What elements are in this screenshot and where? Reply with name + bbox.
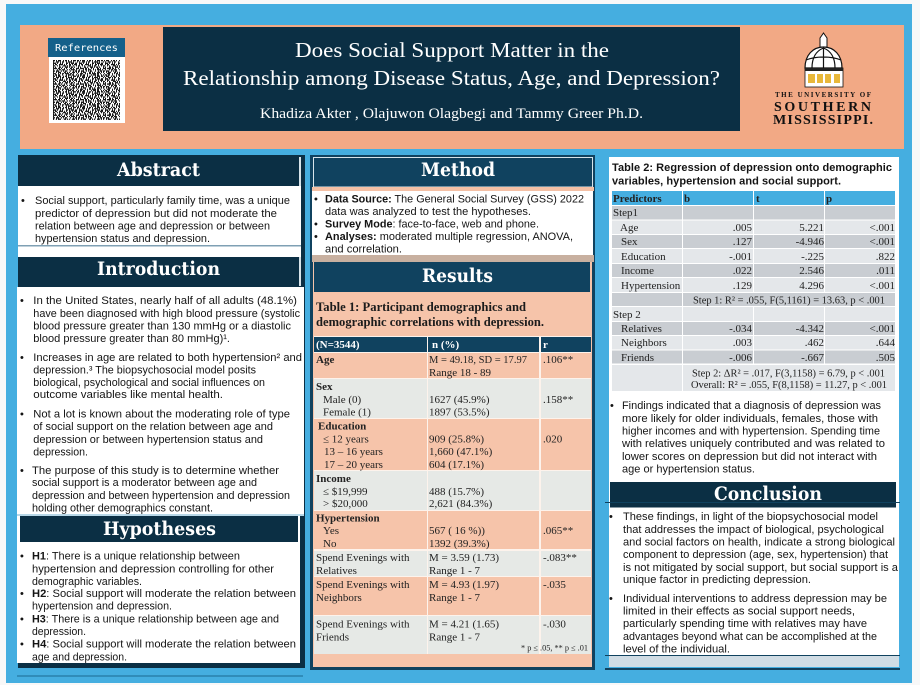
- panel: method: Survey Mode: face-to-face, web and phone.: [325, 218, 539, 230]
- table 2: b: [684, 193, 690, 205]
- table 2: .462: [805, 337, 824, 349]
- table 1: Yes: [323, 525, 339, 537]
- panel: introduction: •: [20, 295, 24, 307]
- panel: conclusion: is not mitigated by social support, but social support is a: [623, 562, 899, 574]
- table 1: .106**: [543, 354, 573, 366]
- panel: hypotheses: •: [20, 638, 24, 650]
- panel: introduction: Not a lot is known about the moderating role of type: [33, 408, 290, 420]
- table 2: Hypertension: [621, 280, 681, 292]
- table 1: Range 1 - 7: [429, 592, 481, 604]
- table 2: Step 2: [613, 309, 641, 321]
- panel: results: [313, 262, 592, 667]
- panel: abstract: hypertension status and depression.: [35, 233, 210, 245]
- middle column: [310, 155, 595, 670]
- panel: conclusion: that addresses the impact of biological, psychological: [623, 524, 884, 536]
- panel: conclusion: component to depression (age, sex, hypertension) that: [623, 549, 888, 561]
- panel: conclusion: •: [609, 511, 613, 523]
- table 1: Spend Evenings with: [316, 618, 410, 630]
- panel: abstract: [18, 157, 301, 257]
- panel: hypotheses: demographic variables.: [32, 576, 142, 588]
- table 2 title: [612, 162, 892, 188]
- table 1: -.083**: [543, 552, 577, 564]
- table 2: <.001: [870, 222, 895, 234]
- panel: introduction: blood pressure greater than 130 mmHg or a diastolic: [33, 320, 291, 332]
- table 2: 5.221: [799, 222, 824, 234]
- table 2: Predictors: [613, 193, 662, 205]
- table 2: -4.946: [796, 236, 824, 248]
- table 1: r: [543, 339, 548, 351]
- table 1: Range 18 - 89: [429, 367, 492, 379]
- table 2: Income: [621, 265, 654, 277]
- table 1: 1897 (53.5%): [429, 406, 490, 418]
- table 1: -.035: [543, 579, 566, 591]
- university logo: SOUTHERN: [774, 100, 871, 115]
- table 2: -.667: [801, 352, 824, 364]
- panel: introduction: Introduction: [97, 258, 220, 280]
- panel: hypotheses: •: [20, 614, 24, 626]
- table 2 title: variables, hypertension and social support.: [612, 176, 841, 188]
- panel: introduction: The purpose of this study is to determine whether: [32, 465, 279, 477]
- table 1: Age: [316, 354, 334, 366]
- table 2: .505: [876, 352, 896, 364]
- table 2: .003: [733, 337, 752, 349]
- panel: abstract: Abstract: [116, 159, 200, 181]
- table 1: 909 (25.8%): [429, 434, 484, 446]
- panel: introduction: depression.: [33, 446, 88, 458]
- panel: abstract: predictor of depression but did not moderate the: [35, 208, 277, 220]
- header banner: [20, 25, 904, 149]
- table 1: M = 4.93 (1.97): [429, 579, 499, 591]
- title box: Does Social Support Matter in the: [295, 38, 609, 62]
- table 1: 2,621 (84.3%): [429, 498, 493, 510]
- title box: [163, 27, 740, 131]
- table 2: 2.546: [799, 265, 824, 277]
- left column: [17, 155, 305, 668]
- table 1: No: [323, 538, 337, 550]
- panel: hypotheses: H1: There is a unique relationship between: [32, 550, 240, 562]
- table 1: * p ≤ .05, ** p ≤ .01: [521, 644, 588, 652]
- table 2: Overall: R² = .055, F(8,1158) = 11.27, p < .001: [691, 379, 887, 391]
- table 1: M = 4.21 (1.65): [429, 618, 499, 630]
- table 1: (N=3544): [316, 339, 360, 351]
- table 1: -.030: [543, 618, 566, 630]
- panel: method: [312, 157, 594, 262]
- table 2: .127: [733, 236, 752, 248]
- panel: hypotheses: H2: Social support will moderate the relation between: [32, 588, 296, 600]
- findings text: lower scores on depression but did not interact with: [622, 451, 877, 463]
- panel: conclusion: level of the individual.: [623, 644, 730, 656]
- findings text: age or hypertension status.: [622, 464, 755, 476]
- panel: hypotheses: [17, 514, 304, 664]
- table 1: M = 3.59 (1.73): [429, 552, 499, 564]
- table 1: Range 1 - 7: [429, 565, 481, 577]
- panel: abstract: relation between age and depression or between: [35, 220, 270, 232]
- table 2: .011: [876, 265, 895, 277]
- table 1: .065**: [543, 525, 573, 537]
- findings text: •: [610, 400, 614, 412]
- panel: hypotheses: hypertension and depression controlling for other: [32, 564, 274, 576]
- table 2: -.006: [729, 352, 752, 364]
- table 2: Education: [621, 251, 666, 263]
- university logo: THE UNIVERSITY OF: [775, 91, 871, 99]
- table 2: p: [826, 193, 832, 205]
- table 1: Female (1): [323, 406, 371, 418]
- table 1: Neighbors: [316, 592, 362, 604]
- panel: abstract: •: [21, 195, 25, 207]
- panel: hypotheses: H4: Social support will moderate the relation between: [32, 638, 296, 650]
- table 1 title: Table 1: Participant demographics and: [316, 299, 527, 314]
- table 2: Step 2: ΔR² = .017, F(3,1158) = 6.79, p < .001: [692, 368, 885, 380]
- QR references block: References: [55, 43, 118, 54]
- panel: conclusion: unique factor in predicting depression.: [623, 574, 811, 586]
- table 1: Spend Evenings with: [316, 552, 410, 564]
- table 1: M = 49.18, SD = 17.97: [429, 354, 527, 366]
- table 1: Spend Evenings with: [316, 579, 410, 591]
- panel: hypotheses: •: [20, 588, 24, 600]
- panel: conclusion: Conclusion: [714, 483, 822, 505]
- panel: method: data was analyzed to test the hypotheses.: [325, 206, 531, 218]
- table 2: -.225: [801, 251, 824, 263]
- panel: hypotheses: H3: There is a unique relationship between age and: [32, 614, 279, 626]
- table 1: 1392 (39.3%): [429, 538, 490, 550]
- panel: hypotheses: depression.: [32, 626, 86, 638]
- panel: method: and correlation.: [325, 244, 402, 256]
- panel: introduction: [17, 257, 304, 514]
- table 1: Sex: [316, 381, 333, 393]
- panel: results: Results: [422, 265, 493, 287]
- table 1: Male (0): [323, 394, 362, 406]
- table 2: t: [756, 193, 760, 205]
- table 2: 4.296: [799, 280, 824, 292]
- panel: conclusion: [605, 482, 900, 656]
- table 1: .158**: [543, 394, 573, 406]
- panel: introduction: blood pressure greater than 80 mmHg)¹.: [33, 333, 230, 345]
- panel: method: •: [314, 218, 318, 230]
- panel: conclusion: and social factors on health, indicate a strong biological: [623, 536, 895, 548]
- panel: conclusion: These findings, in light of the biopsychosocial model: [623, 511, 878, 523]
- table 1: 17 – 20 years: [324, 459, 383, 471]
- panel: introduction: depression.³ The biopsychosocial model posits: [33, 364, 256, 376]
- findings text: higher incomes and with hypertension. Spending time: [622, 426, 880, 438]
- table 2: [612, 191, 896, 391]
- panel: introduction: holding other demographics constant.: [32, 502, 213, 514]
- panel: introduction: biological, psychological and social influences on: [33, 377, 265, 389]
- table 2: Neighbors: [621, 337, 667, 349]
- panel: conclusion: •: [609, 593, 613, 605]
- title box: Relationship among Disease Status, Age, and Depression?: [183, 66, 720, 90]
- findings text: with relatives uniquely contributed and was related to: [621, 438, 885, 450]
- panel: hypotheses: Hypotheses: [103, 518, 216, 540]
- table 1: 1627 (45.9%): [429, 394, 490, 406]
- findings text: [610, 400, 885, 476]
- panel: introduction: of social support on the relation between age and: [33, 421, 273, 433]
- table 1: [314, 336, 591, 654]
- panel: introduction: have been diagnosed with high blood pressure (systolic: [33, 308, 300, 320]
- table 2: Step 1: R² = .055, F(5,1161) = 13.63, p < .001: [693, 294, 885, 306]
- panel: conclusion: advantages beyond what can be accomplished at the: [623, 631, 877, 643]
- table 1: Hypertension: [316, 512, 380, 524]
- panel: method: •: [314, 231, 318, 243]
- table 2: Friends: [621, 352, 654, 364]
- panel: introduction: depression and between hypertension and depression: [32, 490, 290, 502]
- table 2: Relatives: [621, 323, 662, 335]
- table 1: > $20,000: [323, 498, 368, 510]
- table 2: .822: [876, 251, 895, 263]
- title box: Khadiza Akter , Olajuwon Olagbegi and Tammy Greer Ph.D.: [260, 106, 643, 122]
- table 2: -4.342: [796, 323, 824, 335]
- table 2: .005: [733, 222, 752, 234]
- table 1: n (%): [432, 339, 460, 351]
- panel: hypotheses: •: [20, 550, 24, 562]
- panel: conclusion: Individual interventions to address depression may be: [623, 593, 887, 605]
- table 2: <.001: [870, 323, 895, 335]
- table 2: Sex: [621, 236, 638, 248]
- panel: conclusion: particularly spending time with relatives may have: [623, 618, 867, 630]
- panel: introduction: outcome variables like mental health.: [33, 389, 223, 401]
- panel: introduction: depression or between hypertension status and: [33, 434, 263, 446]
- table 1: 1,660 (47.1%): [429, 446, 493, 458]
- table 1: 13 – 16 years: [324, 446, 383, 458]
- table 2: <.001: [870, 280, 895, 292]
- table 1 title: demographic correlations with depression.: [316, 314, 544, 329]
- table 2 title: Table 2: Regression of depression onto demographic: [612, 162, 892, 174]
- table 2: Step1: [613, 207, 638, 219]
- panel: abstract: Social support, particularly family time, was a unique: [35, 195, 290, 207]
- table 2: <.001: [870, 236, 895, 248]
- panel: conclusion: limited in their effects as social support needs,: [623, 606, 855, 618]
- findings text: more likely for older individuals, females, those with: [622, 413, 878, 425]
- panel: method: Data Source: The General Social Survey (GSS) 2022: [325, 194, 584, 206]
- findings text: Findings indicated that a diagnosis of depression was: [622, 400, 881, 412]
- table 2: .129: [733, 280, 752, 292]
- table 1: ≤ 12 years: [323, 434, 369, 446]
- table 1: 567 ( 16 %)): [429, 525, 485, 537]
- university logo: [773, 33, 873, 128]
- university logo: MISSISSIPPI.: [773, 113, 873, 128]
- table 1: 604 (17.1%): [429, 459, 484, 471]
- panel: method: Analyses: moderated multiple regression, ANOVA,: [325, 231, 573, 243]
- panel: introduction: •: [20, 465, 24, 477]
- table 1: Education: [318, 420, 366, 432]
- right column: [605, 157, 900, 670]
- table 1 title: [316, 299, 544, 329]
- table 1: .020: [543, 434, 563, 446]
- table 1: Income: [316, 473, 351, 485]
- panel: introduction: •: [20, 408, 24, 420]
- table 2: .022: [733, 265, 752, 277]
- panel: hypotheses: hypertension and depression.: [32, 600, 172, 612]
- table 1: Range 1 - 7: [429, 632, 481, 644]
- table 2: -.001: [729, 251, 752, 263]
- table 2: .644: [876, 337, 896, 349]
- table 1: ≤ $19,999: [323, 486, 368, 498]
- panel: hypotheses: age and depression.: [32, 652, 127, 664]
- table 2: Age: [620, 222, 638, 234]
- panel: method: •: [314, 194, 318, 206]
- table 2: -.034: [729, 323, 752, 335]
- panel: introduction: social support is a moderator between age and: [32, 477, 257, 489]
- table 1: Friends: [316, 632, 349, 644]
- panel: introduction: Increases in age are related to both hypertension² and: [33, 352, 302, 364]
- table 1: 488 (15.7%): [429, 486, 484, 498]
- QR references block: [48, 38, 125, 123]
- panel: method: Method: [421, 159, 495, 181]
- table 1: Relatives: [316, 565, 357, 577]
- panel: introduction: In the United States, nearly half of all adults (48.1%): [33, 295, 297, 307]
- panel: introduction: •: [20, 352, 24, 364]
